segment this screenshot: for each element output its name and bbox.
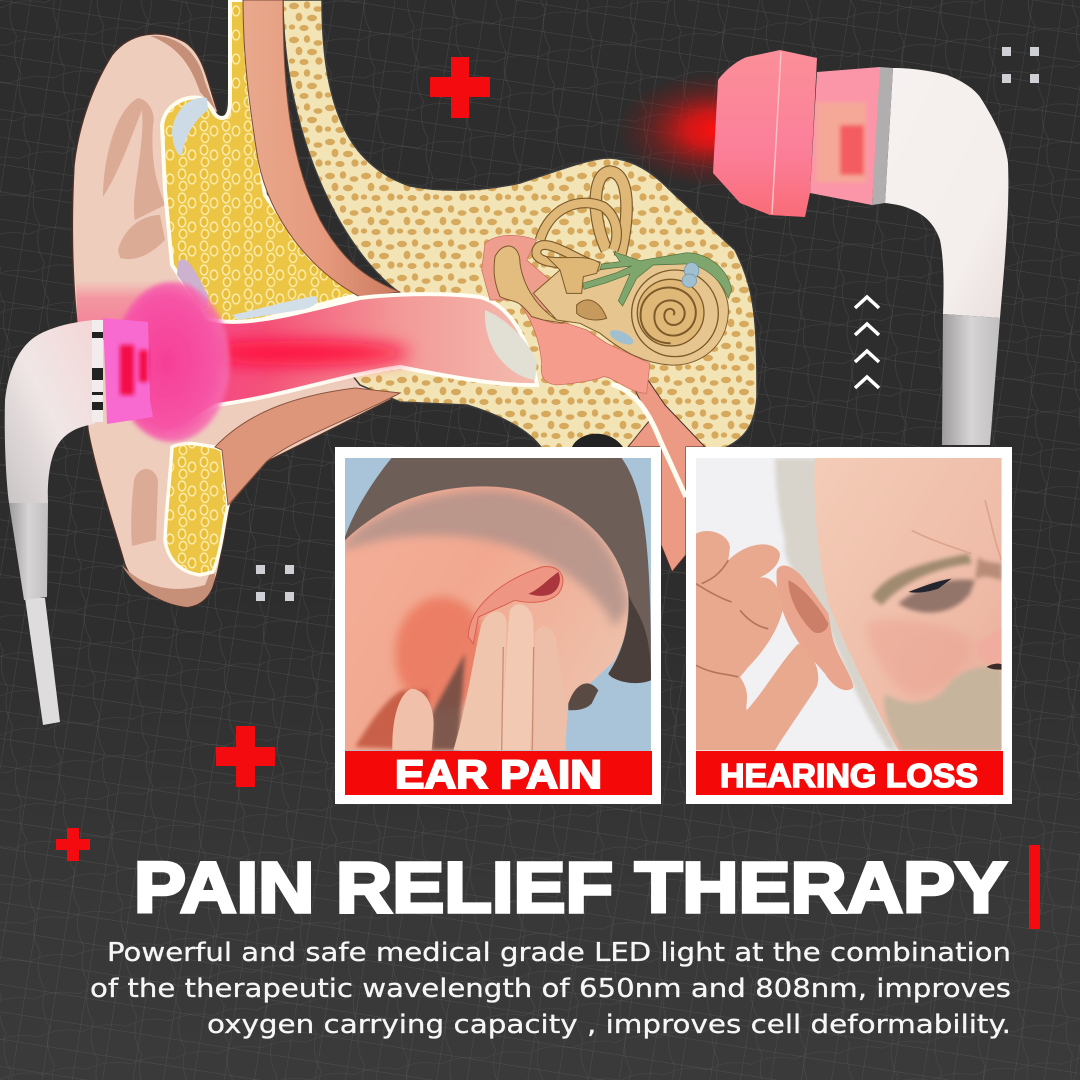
- chevron arrows pointing up: [855, 297, 879, 388]
- left earbud: [5, 318, 153, 725]
- red light beam in canal: [190, 341, 410, 365]
- vestibule: [547, 257, 600, 293]
- pink glow around earbud: [114, 282, 230, 442]
- middle ear tissue: [482, 235, 573, 313]
- pink band over pinna: [76, 280, 205, 340]
- red glow: [616, 72, 816, 188]
- panel: ear pain photo card: [335, 447, 661, 804]
- cochlea base: [533, 260, 728, 365]
- red cross middle: [216, 726, 275, 787]
- metal ring: [92, 320, 103, 422]
- title: PAIN RELIEF THERAPY: [134, 849, 1007, 928]
- body text: of the therapeutic wavelength of 650nm and 808nm, improves: [90, 974, 1011, 1004]
- pinna rim shading: [122, 36, 216, 607]
- body: [5, 320, 95, 503]
- auditory nerve: [583, 252, 732, 306]
- cochlea spiral: [632, 270, 718, 357]
- silver ring: [872, 67, 893, 205]
- pinna lower fold: [131, 469, 158, 546]
- label: ear pain: [345, 751, 652, 797]
- cartilage side: [177, 259, 208, 306]
- pinna inner folds: [103, 98, 165, 259]
- translucent section: [810, 67, 880, 205]
- cartilage top: [172, 98, 208, 155]
- inner ear structures: [482, 172, 732, 393]
- ear canal: [150, 294, 537, 433]
- body text: oxygen carrying capacity , improves cell deformability.: [207, 1010, 1011, 1040]
- pink silicone tip: [713, 50, 817, 217]
- body: [885, 68, 1008, 318]
- cable: [25, 598, 60, 725]
- dot grid top right: [1002, 47, 1039, 83]
- red LED: [816, 102, 866, 182]
- red cross small: [56, 828, 90, 861]
- jaw tube right: [628, 380, 705, 572]
- upper muscle strip: [243, 0, 400, 297]
- body text: [90, 938, 1011, 1040]
- right earbud: [616, 50, 1008, 445]
- semicircular canals: [536, 172, 627, 267]
- red cross top: [430, 57, 490, 118]
- round window lower: [682, 274, 697, 287]
- white tube wall: [612, 384, 686, 497]
- dot grid middle: [256, 565, 294, 601]
- tip seam: [772, 52, 781, 214]
- lower yellow tissue: [165, 443, 228, 575]
- stem connector: [942, 314, 1000, 445]
- photo: older man cupping ear: [696, 458, 1002, 751]
- stem connector: [9, 503, 48, 600]
- label: hearing loss: HEARING LOSS: [720, 757, 978, 794]
- lower pink tissue: [517, 300, 650, 393]
- red LED: [120, 345, 148, 395]
- oval window: [577, 300, 607, 320]
- round windows: [684, 263, 699, 279]
- ear anatomy illustration: [72, 0, 757, 607]
- blue fluid: [608, 327, 635, 347]
- gap in bone under ear canal: [571, 434, 625, 450]
- body text: Powerful and safe medical grade LED light at the combination: [107, 938, 1011, 968]
- panel: hearing loss photo card: [686, 447, 1012, 804]
- label: ear pain: EAR PAIN: [395, 753, 602, 797]
- red accent bar: [1029, 845, 1040, 929]
- temporal bone: [283, 0, 757, 450]
- outer ear pinna: [72, 34, 400, 607]
- photo: man holding ear: [345, 458, 651, 751]
- eardrum: [485, 310, 537, 380]
- cartilage bottom: [232, 296, 318, 320]
- upper fat tissue: [162, 0, 365, 325]
- lower muscle strip: [215, 388, 400, 505]
- ossicle bones: [494, 246, 569, 323]
- pink translucent tip: [103, 318, 153, 424]
- label: hearing loss: [696, 751, 1003, 795]
